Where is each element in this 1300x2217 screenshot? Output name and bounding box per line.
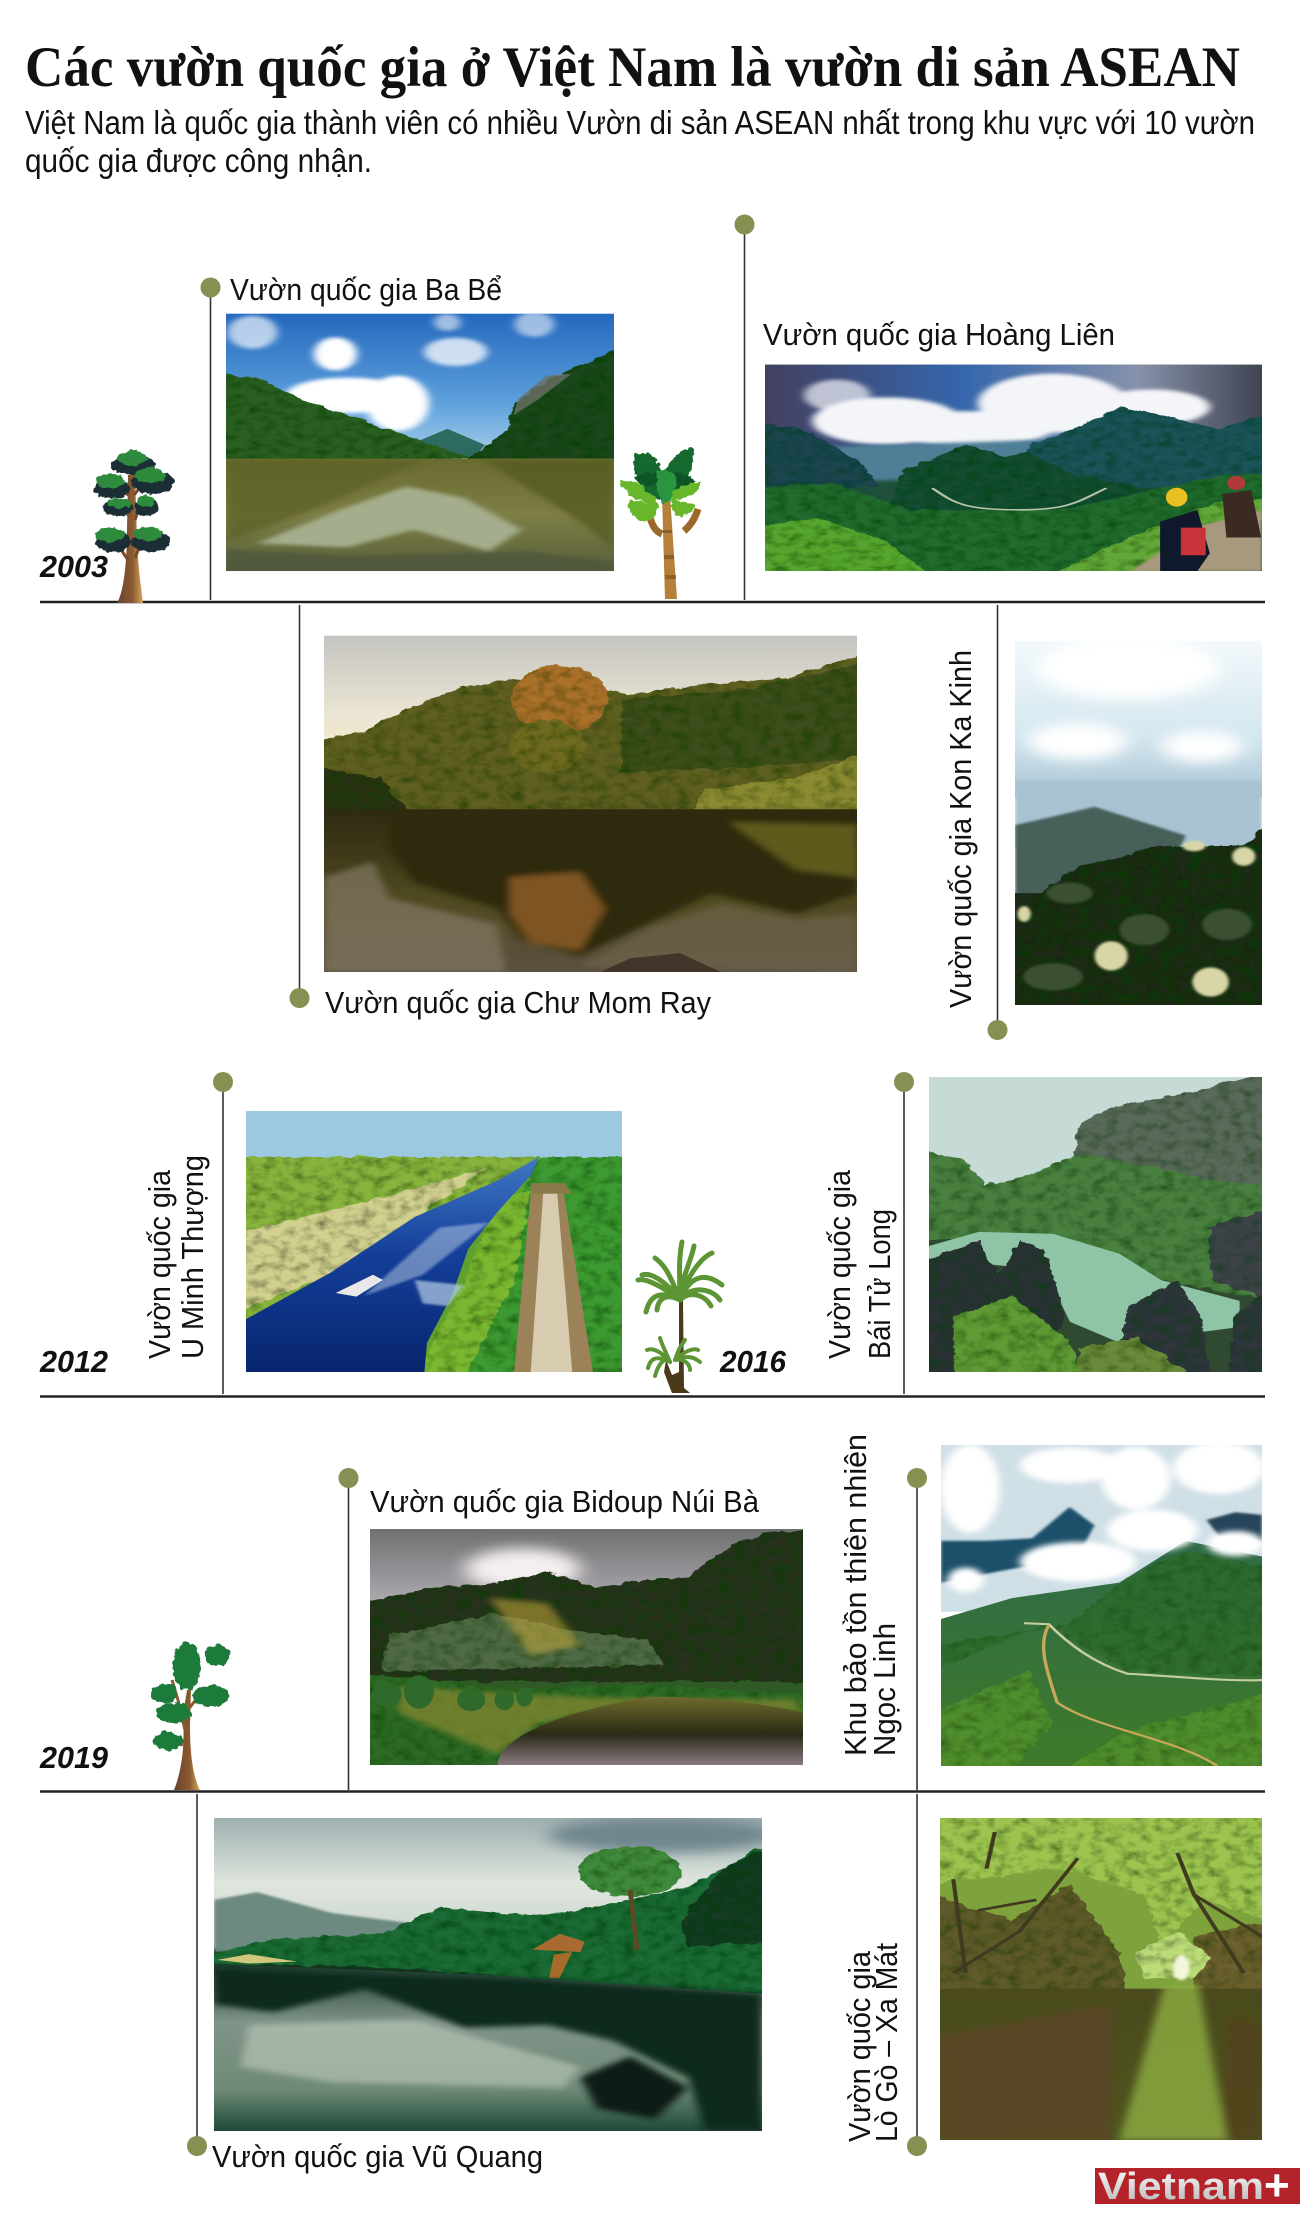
panel: Bai Tu Long: Vườn quốc gia [822,1169,857,1359]
timeline axis 2003 [40,601,1265,603]
photo: Bai Tu Long lake [929,1077,1262,1372]
panel: Ba Be: Vườn quốc gia Ba Bể [230,272,502,307]
panel: Chu Mom Ray [290,605,865,1020]
panel: Chu Mom Ray: Vườn quốc gia Chư Mom Ray [325,985,711,1020]
panel: U Minh Thuong: Vườn quốc gia [142,1169,177,1359]
panel: Kon Ka Kinh [943,605,1270,1040]
panel: Hoang Lien: Vườn quốc gia Hoàng Liên [763,317,1115,352]
subtitle text [25,104,1255,179]
photo: Chu Mom Ray forest [324,636,857,972]
panel: Bai Tu Long [822,1072,1270,1394]
timeline axis 2016 [40,1395,1265,1398]
panel: Ngoc Linh: Khu bảo tồn thiên nhiên [838,1434,873,1756]
icon: tree 2003 [94,450,174,603]
logo: Vietnam+: + [1264,2161,1290,2210]
panel: Ngoc Linh: Ngọc Linh [867,1623,902,1756]
year label 2012: 2012 [39,1344,108,1379]
panel: Bidoup Nui Ba: Vườn quốc gia Bidoup Núi Bà [370,1484,760,1519]
icon: tree 2019 [151,1642,229,1790]
year label 2016: 2016 [719,1344,787,1379]
photo: Ba Be lake [226,314,614,572]
panel: Vu Quang [187,1794,779,2174]
photo: Bidoup Nui Ba pines [370,1529,803,1765]
icon: sugar palm [638,1242,722,1393]
timeline axis 2019 [40,1790,1265,1793]
panel: Lo Go Xa Mat: Lò Gò – Xa Mát [869,1943,904,2142]
logo: Vietnam+ [1095,2161,1300,2210]
panel: Ngoc Linh [838,1434,1270,1790]
photo: Vu Quang lake [214,1818,762,2131]
icon: palm tree [620,449,701,599]
panel: U Minh Thuong [142,1072,630,1394]
title: Các vườn quốc gia ở Việt Nam là vườn di sản ASEAN [25,36,1240,99]
photo: U Minh Thuong canal [246,1111,622,1372]
panel: Bidoup Nui Ba [338,1468,811,1790]
photo: Kon Ka Kinh [1015,641,1262,1005]
panel: Lo Go Xa Mat: Vườn quốc gia [842,1950,877,2142]
subtitle text: quốc gia được công nhận. [25,142,372,179]
panel: Lo Go Xa Mat [842,1794,1270,2156]
panel: Kon Ka Kinh: Vườn quốc gia Kon Ka Kinh [943,650,978,1008]
year label 2003: 2003 [39,549,108,584]
panel: Vu Quang: Vườn quốc gia Vũ Quang [212,2139,543,2174]
panel: U Minh Thuong: U Minh Thượng [175,1155,210,1359]
panel: Bai Tu Long: Bái Tử Long [862,1209,897,1359]
panel: Ba Be [200,272,630,600]
logo: Vietnam+: Vietnam [1098,2166,1264,2208]
year label 2019: 2019 [39,1740,109,1775]
panel: Hoang Lien [734,214,1270,600]
photo: Ngoc Linh mountain road [941,1445,1262,1766]
photo: Lo Go Xa Mat mangrove [940,1818,1262,2140]
photo: Hoang Lien mountains [765,364,1262,571]
